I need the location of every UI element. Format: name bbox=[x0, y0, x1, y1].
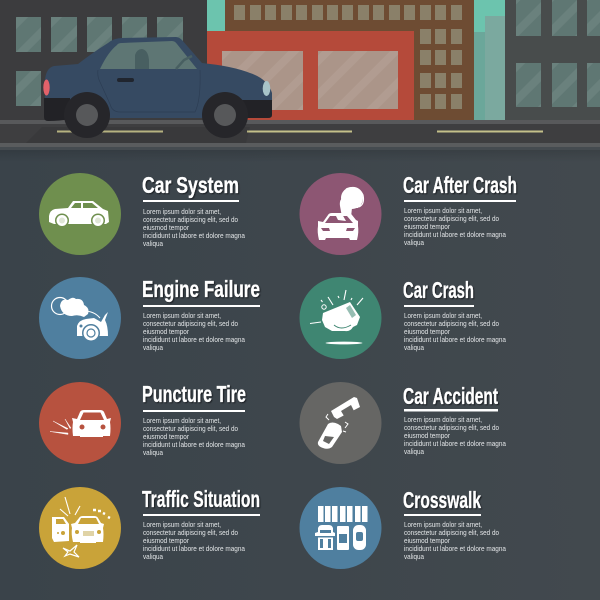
text block: incididunt ut labore et dolore magna bbox=[143, 231, 246, 240]
icon: cars at crosswalk bbox=[300, 487, 382, 569]
text block: Lorem ipsum dolor sit amet, bbox=[143, 311, 221, 320]
red shop front bbox=[207, 31, 414, 120]
text block: incididunt ut labore et dolore magna bbox=[143, 544, 246, 553]
dark building right bbox=[505, 0, 600, 120]
text block: incididunt ut labore et dolore magna bbox=[143, 335, 246, 344]
icon: car with burst tire bbox=[39, 382, 121, 464]
item: Car After Crash bbox=[300, 172, 517, 255]
text block: consectetur adipiscing elit, sed do bbox=[143, 215, 238, 224]
text block: consectetur adipiscing elit, sed do bbox=[143, 528, 238, 537]
text block: valiqua bbox=[404, 447, 425, 456]
text block: eiusmod tempor bbox=[404, 222, 450, 231]
text block: eiusmod tempor bbox=[143, 327, 189, 336]
text block: consectetur adipiscing elit, sed do bbox=[404, 528, 499, 537]
icon: two colliding cars bbox=[300, 382, 382, 464]
text block: incididunt ut labore et dolore magna bbox=[404, 544, 507, 553]
rule bbox=[143, 305, 260, 307]
text block: consectetur adipiscing elit, sed do bbox=[143, 424, 238, 433]
text block: valiqua bbox=[404, 238, 425, 247]
heading: Traffic Situation bbox=[142, 486, 260, 512]
text block: Lorem ipsum dolor sit amet, bbox=[404, 415, 482, 424]
text block: eiusmod tempor bbox=[404, 536, 450, 545]
text block: Lorem ipsum dolor sit amet, bbox=[404, 520, 482, 529]
text block: consectetur adipiscing elit, sed do bbox=[143, 319, 238, 328]
item: Crosswalk bbox=[300, 487, 507, 569]
item: Traffic Situation bbox=[39, 486, 260, 569]
text block: incididunt ut labore et dolore magna bbox=[404, 439, 507, 448]
rule bbox=[404, 514, 481, 516]
text block: incididunt ut labore et dolore magna bbox=[404, 335, 507, 344]
item: Engine Failure bbox=[39, 276, 260, 359]
text block: incididunt ut labore et dolore magna bbox=[404, 230, 507, 239]
text block: valiqua bbox=[404, 343, 425, 352]
text block: Lorem ipsum dolor sit amet, bbox=[404, 311, 482, 320]
teal sky gap bbox=[207, 0, 225, 32]
heading: Engine Failure bbox=[142, 276, 260, 302]
item: Car Accident bbox=[300, 382, 507, 464]
heading: Puncture Tire bbox=[142, 381, 246, 407]
text block: valiqua bbox=[143, 239, 164, 248]
text block: valiqua bbox=[143, 448, 164, 457]
icon: smoking engine bbox=[39, 277, 121, 359]
text block: valiqua bbox=[143, 343, 164, 352]
icon: bumper to bumper cars bbox=[39, 487, 121, 569]
text block: Lorem ipsum dolor sit amet, bbox=[404, 206, 482, 215]
text block: valiqua bbox=[143, 552, 164, 561]
brown building bbox=[225, 0, 474, 120]
street scene header bbox=[0, 0, 600, 150]
heading: Car Accident bbox=[403, 383, 498, 409]
text block: eiusmod tempor bbox=[404, 431, 450, 440]
text block: eiusmod tempor bbox=[143, 223, 189, 232]
text block: consectetur adipiscing elit, sed do bbox=[404, 319, 499, 328]
road bbox=[0, 120, 600, 150]
text block: consectetur adipiscing elit, sed do bbox=[404, 423, 499, 432]
text block: eiusmod tempor bbox=[404, 327, 450, 336]
text block: valiqua bbox=[404, 552, 425, 561]
item: Car Crash bbox=[300, 277, 507, 359]
icon: smoking car front bbox=[300, 173, 382, 255]
rule bbox=[143, 200, 239, 202]
text block: Lorem ipsum dolor sit amet, bbox=[143, 520, 221, 529]
rule bbox=[143, 410, 245, 412]
item: Car System bbox=[39, 172, 246, 255]
heading: Car System bbox=[142, 172, 239, 198]
teal background towers bbox=[474, 0, 505, 120]
icon: side view car bbox=[39, 173, 121, 255]
dark building left bbox=[0, 0, 207, 120]
heading: Car Crash bbox=[403, 277, 474, 303]
text block: consectetur adipiscing elit, sed do bbox=[404, 214, 499, 223]
icon: overturned car bbox=[300, 277, 382, 359]
rule bbox=[404, 305, 474, 307]
heading: Crosswalk bbox=[403, 487, 481, 513]
text block: incididunt ut labore et dolore magna bbox=[143, 440, 246, 449]
soft shadow below the road bbox=[0, 150, 600, 162]
text block: Lorem ipsum dolor sit amet, bbox=[143, 207, 221, 216]
text block: eiusmod tempor bbox=[143, 432, 189, 441]
item: Puncture Tire bbox=[39, 381, 246, 464]
car bbox=[26, 37, 272, 143]
text block: eiusmod tempor bbox=[143, 536, 189, 545]
rule bbox=[143, 514, 260, 516]
heading: Car After Crash bbox=[403, 172, 517, 198]
rule bbox=[404, 200, 516, 202]
text block: Lorem ipsum dolor sit amet, bbox=[143, 416, 221, 425]
rule bbox=[404, 409, 498, 412]
